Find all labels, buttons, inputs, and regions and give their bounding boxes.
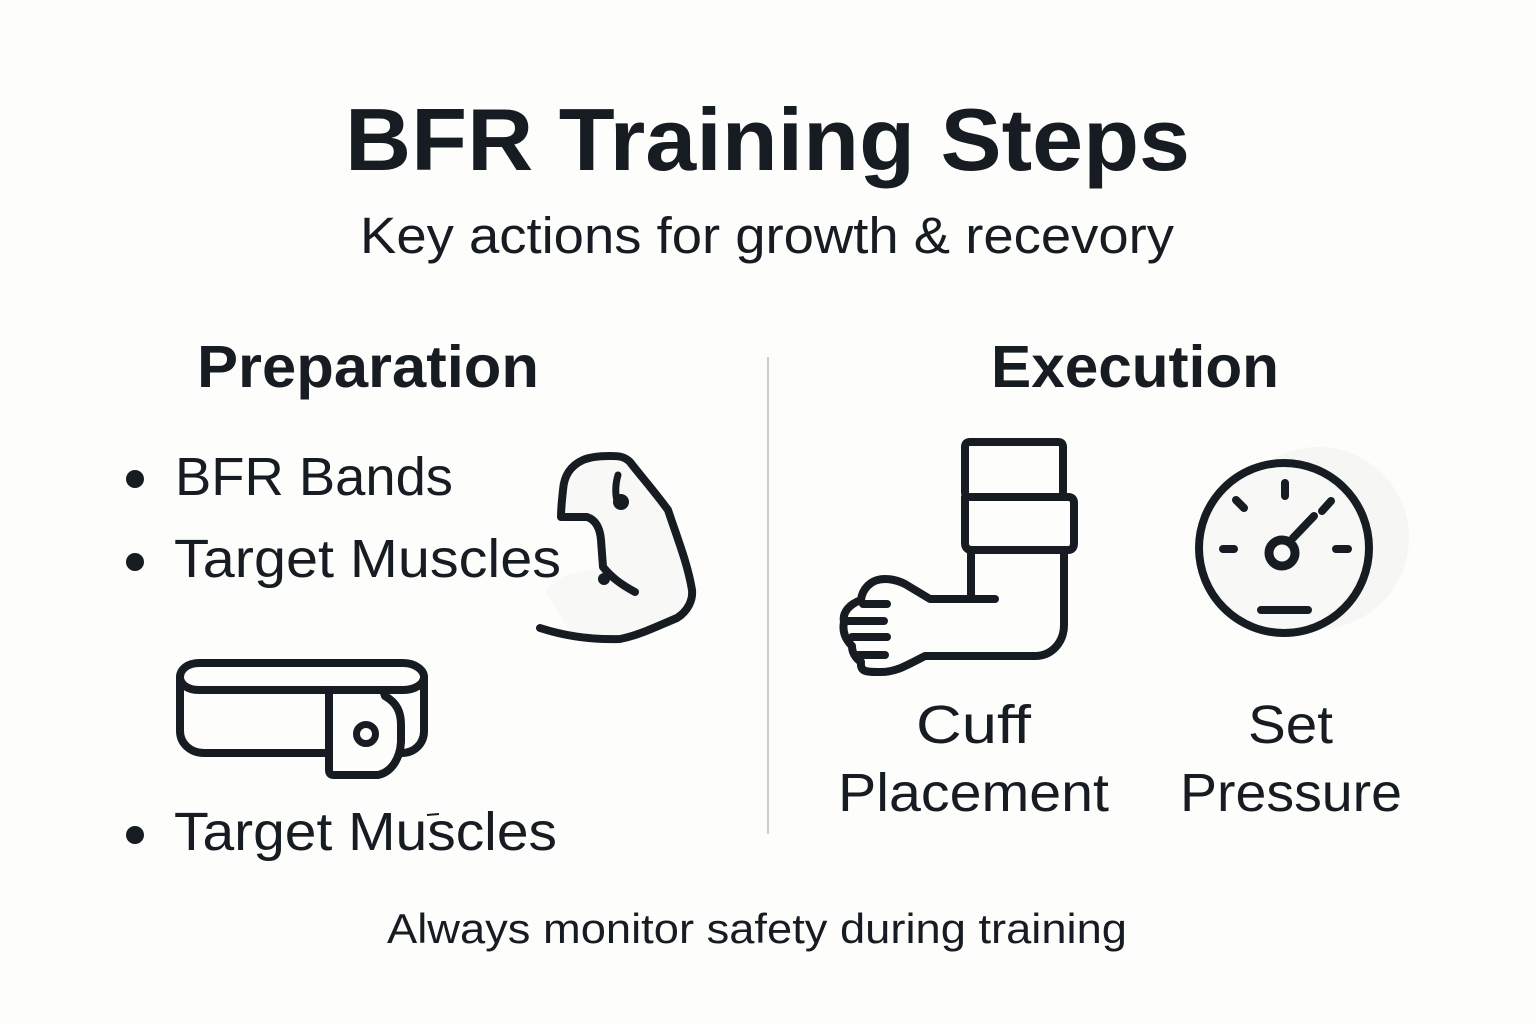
subtitle: Key actions for growth & recevory <box>360 207 1175 264</box>
footer note: Always monitor safety during training <box>387 905 1127 952</box>
label: cuff placement: Cuff <box>916 695 1032 755</box>
list item: BFR Bands: BFR Bands <box>175 447 453 507</box>
icon: arm with cuff <box>843 442 1074 672</box>
label: set pressure <box>1180 695 1402 823</box>
list item: Target Muscles repeated: Target Muscles <box>174 802 557 862</box>
icon: pressure gauge <box>1199 447 1409 633</box>
list item: Target Muscles: Target Muscles <box>174 529 561 589</box>
panel: preparation <box>126 334 692 862</box>
icon: BFR band <box>180 663 424 775</box>
icon: flexed muscle <box>540 456 692 639</box>
title: BFR Training Steps <box>345 90 1190 189</box>
heading: preparation: Preparation <box>197 334 539 400</box>
label: set pressure: Pressure <box>1180 763 1402 823</box>
label: set pressure: Set <box>1248 695 1333 755</box>
panel: execution <box>838 334 1409 823</box>
heading: execution: Execution <box>991 334 1279 400</box>
label: cuff placement: Placement <box>838 763 1109 823</box>
label: cuff placement <box>838 695 1109 823</box>
